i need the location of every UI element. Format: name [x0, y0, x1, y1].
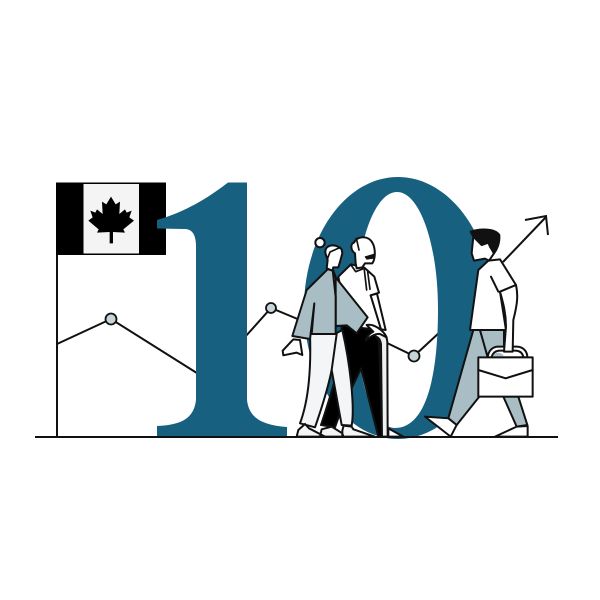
man head: [351, 237, 375, 268]
line chart: trend line with arrow: [57, 216, 548, 375]
woman hand: [283, 339, 302, 355]
man trousers: [321, 325, 382, 437]
woman hair bun: [315, 238, 325, 247]
hand on cane: [366, 325, 387, 341]
cane: [375, 331, 388, 437]
woman head: [325, 245, 342, 271]
back shoe: [495, 426, 528, 437]
woman jacket: [292, 269, 336, 339]
arm: [500, 285, 517, 352]
younger man with briefcase: [425, 229, 533, 437]
man torso: [338, 264, 382, 330]
woman trousers: [300, 330, 353, 427]
shirt: [470, 259, 516, 330]
man shoe: [388, 428, 403, 437]
man arm: [371, 294, 386, 330]
numeral: one: [157, 182, 287, 437]
back leg: [480, 330, 527, 427]
woman shoes: [297, 424, 375, 437]
briefcase: [478, 347, 533, 397]
woman shirt: [333, 271, 348, 326]
hair: [471, 229, 499, 253]
woman jacket far sleeve: [336, 277, 368, 333]
flag with pole: [56, 182, 166, 437]
head: [472, 237, 494, 261]
front shoe: [425, 417, 457, 437]
numeral: zero: [304, 177, 493, 439]
man collar and details: [351, 238, 370, 290]
front leg: [448, 330, 488, 425]
chart points: [106, 303, 420, 362]
man moustache: [365, 254, 374, 259]
icon: maple leaf: [88, 197, 134, 243]
ground line: [35, 436, 558, 438]
older couple: [283, 237, 403, 437]
